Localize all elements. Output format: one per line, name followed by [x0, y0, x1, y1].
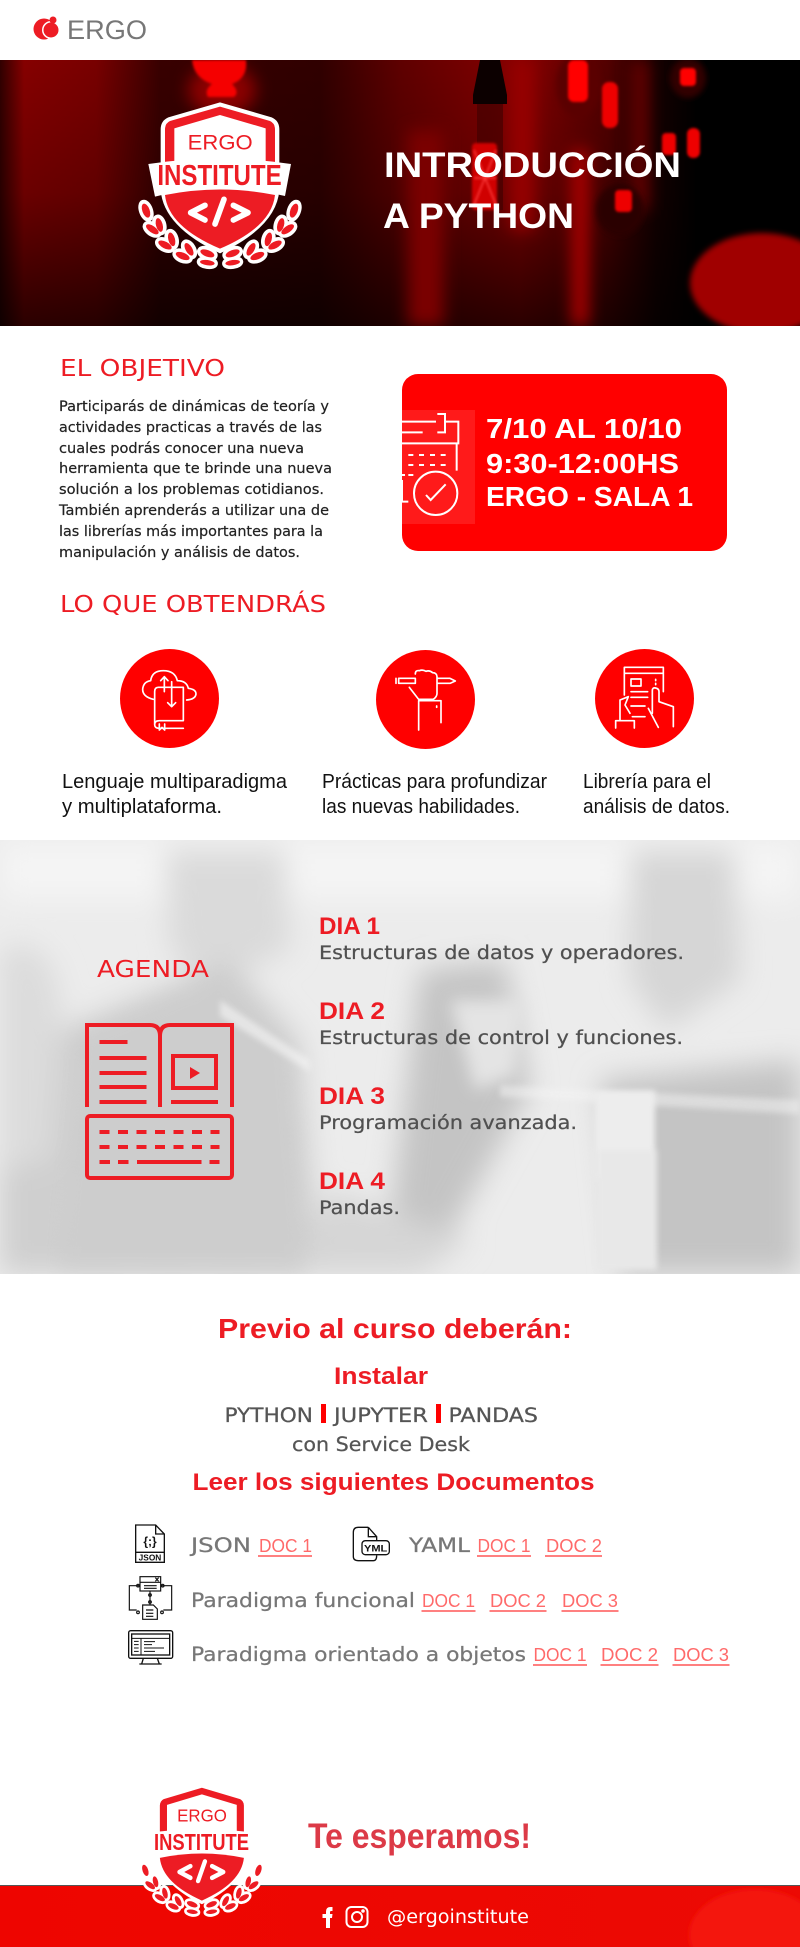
icon: document and hand	[595, 649, 694, 748]
icon: book and keyboard	[87, 1025, 232, 1178]
heading: El objetivo: EL OBJETIVO	[60, 356, 225, 382]
text block: objetivo: manipulación y análisis de datos.	[59, 545, 300, 561]
icon: monitor with code	[129, 1631, 173, 1664]
panel: fecha y sala: 7/10 AL 10/10	[486, 413, 682, 444]
caption: prácticas: las nuevas habilidades.	[322, 796, 520, 818]
icon: hanging bulb with socket	[472, 60, 507, 210]
icon: facebook	[322, 1907, 332, 1928]
text block: dia 1	[319, 913, 684, 964]
icon: glowing bulbs	[568, 60, 700, 212]
text row: JSON	[189, 1534, 312, 1557]
caption: lenguaje	[62, 771, 288, 818]
text row: paradigma orientado a objetos	[191, 1643, 730, 1666]
caption: librería: Librería para el	[583, 771, 711, 793]
icon: functional paradigm	[129, 1577, 172, 1619]
badge: Ergo Institute hero	[139, 102, 301, 267]
text block: herramientas: PYTHON	[224, 1404, 313, 1427]
text block: dia 1: Estructuras de datos y operadores.	[319, 943, 684, 964]
heading: previo al curso: Previo al curso deberán:	[218, 1313, 572, 1344]
text row: paradigma orientado a objetos: DOC 1	[534, 1645, 586, 1665]
text block: objetivo	[58, 399, 332, 561]
icon: calendar with check	[402, 410, 475, 524]
caption: librería: análisis de datos.	[583, 796, 730, 818]
title: INTRODUCCIÓN	[384, 145, 681, 185]
panel: agenda	[0, 840, 800, 1274]
heading: agenda: AGENDA	[97, 957, 209, 983]
panel: footer band	[0, 1885, 800, 1947]
text row: YAML	[408, 1534, 602, 1557]
text block: dia 2	[319, 998, 683, 1049]
text row: YAML: DOC 1	[478, 1536, 530, 1556]
text block: objetivo: actividades practicas a través de las	[59, 420, 322, 436]
caption: prácticas	[322, 771, 547, 818]
text row: paradigma funcional	[191, 1589, 618, 1612]
text block: dia 3: DIA 3	[319, 1083, 385, 1110]
heading: leer documentos: Leer los siguientes Documentos	[192, 1469, 594, 1496]
text row: YAML: YAML	[408, 1534, 470, 1557]
text block: herramientas: JUPYTER	[332, 1404, 428, 1427]
text row: paradigma funcional: Paradigma funcional	[191, 1589, 415, 1612]
text block: objetivo: solución a los problemas cotidianos.	[59, 482, 324, 498]
text row: paradigma orientado a objetos: DOC 2	[601, 1645, 658, 1665]
panel: hero banner	[0, 53, 800, 333]
badge: Ergo Institute hero: ERGO	[188, 129, 253, 154]
text row: paradigma orientado a objetos: DOC 3	[673, 1645, 729, 1665]
caption: lenguaje: y multiplataforma.	[62, 796, 222, 818]
logo: ERGO: ERGO	[67, 15, 147, 45]
heading: Lo que obtendrás: LO QUE OBTENDRÁS	[60, 590, 326, 618]
text block: objetivo: cuales podrás conocer una nueva	[59, 441, 304, 457]
icon: cloud and book	[120, 649, 219, 748]
text block: objetivo: También aprenderás a utilizar una de	[58, 503, 329, 519]
badge: Ergo Institute footer: INSTITUTE	[154, 1830, 249, 1855]
title: A PYTHON	[383, 197, 574, 236]
text block: dia 2: DIA 2	[319, 998, 385, 1025]
caption: lenguaje: Lenguaje multiparadigma	[62, 771, 288, 793]
icon: hand holding pen	[376, 650, 475, 749]
text block: dia 1: DIA 1	[319, 913, 380, 940]
title	[383, 145, 681, 236]
text block: dia 4	[319, 1168, 400, 1219]
handle: @ergoinstitute	[387, 1907, 529, 1928]
badge: Ergo Institute footer	[140, 1784, 264, 1916]
text block: objetivo: herramienta que te brinde una nueva	[59, 461, 332, 477]
text block: herramientas: con Service Desk	[292, 1433, 471, 1456]
icon: large blurred bulb	[690, 233, 800, 333]
text block: dia 3	[319, 1083, 577, 1134]
icon: YAML file: YML	[364, 1543, 388, 1553]
text row: paradigma funcional: DOC 3	[562, 1591, 618, 1611]
text block: dia 2: Estructuras de control y funciones.	[319, 1028, 683, 1049]
icon: JSON file	[136, 1525, 164, 1562]
caption: prácticas: Prácticas para profundizar	[322, 771, 547, 793]
callout: te esperamos: Te esperamos!	[308, 1817, 531, 1856]
text block: objetivo: Participarás de dinámicas de teoría y	[59, 399, 329, 415]
text row: paradigma funcional: DOC 1	[422, 1591, 475, 1611]
text row: JSON: DOC 1	[259, 1536, 312, 1556]
panel: fecha y sala: ERGO - SALA 1	[486, 481, 693, 512]
heading: instalar: Instalar	[334, 1363, 428, 1390]
panel: fecha y sala	[402, 374, 727, 551]
text row: paradigma orientado a objetos: Paradigma orientado a objetos	[191, 1643, 526, 1666]
caption: librería	[583, 771, 730, 818]
text row: paradigma funcional: DOC 2	[490, 1591, 546, 1611]
text block: dia 3: Programación avanzada.	[319, 1113, 577, 1134]
text row: JSON: JSON	[189, 1534, 251, 1557]
text block: herramientas: PANDAS	[448, 1404, 538, 1427]
text block: herramientas	[224, 1404, 538, 1456]
icon: YAML file	[353, 1527, 389, 1561]
badge: Ergo Institute footer: ERGO	[177, 1806, 227, 1826]
badge: Ergo Institute hero: INSTITUTE	[157, 160, 282, 192]
text block: objetivo: las librerías más importantes para la	[59, 524, 323, 540]
text block: dia 4: DIA 4	[319, 1168, 386, 1195]
icon: JSON file: {;}	[143, 1534, 157, 1548]
icon: instagram	[346, 1907, 368, 1927]
panel: fecha y sala: 9:30-12:00HS	[486, 448, 679, 479]
text block: dia 4: Pandas.	[319, 1198, 400, 1219]
text row: YAML: DOC 2	[546, 1536, 602, 1556]
icon: JSON file: JSON	[139, 1552, 161, 1562]
